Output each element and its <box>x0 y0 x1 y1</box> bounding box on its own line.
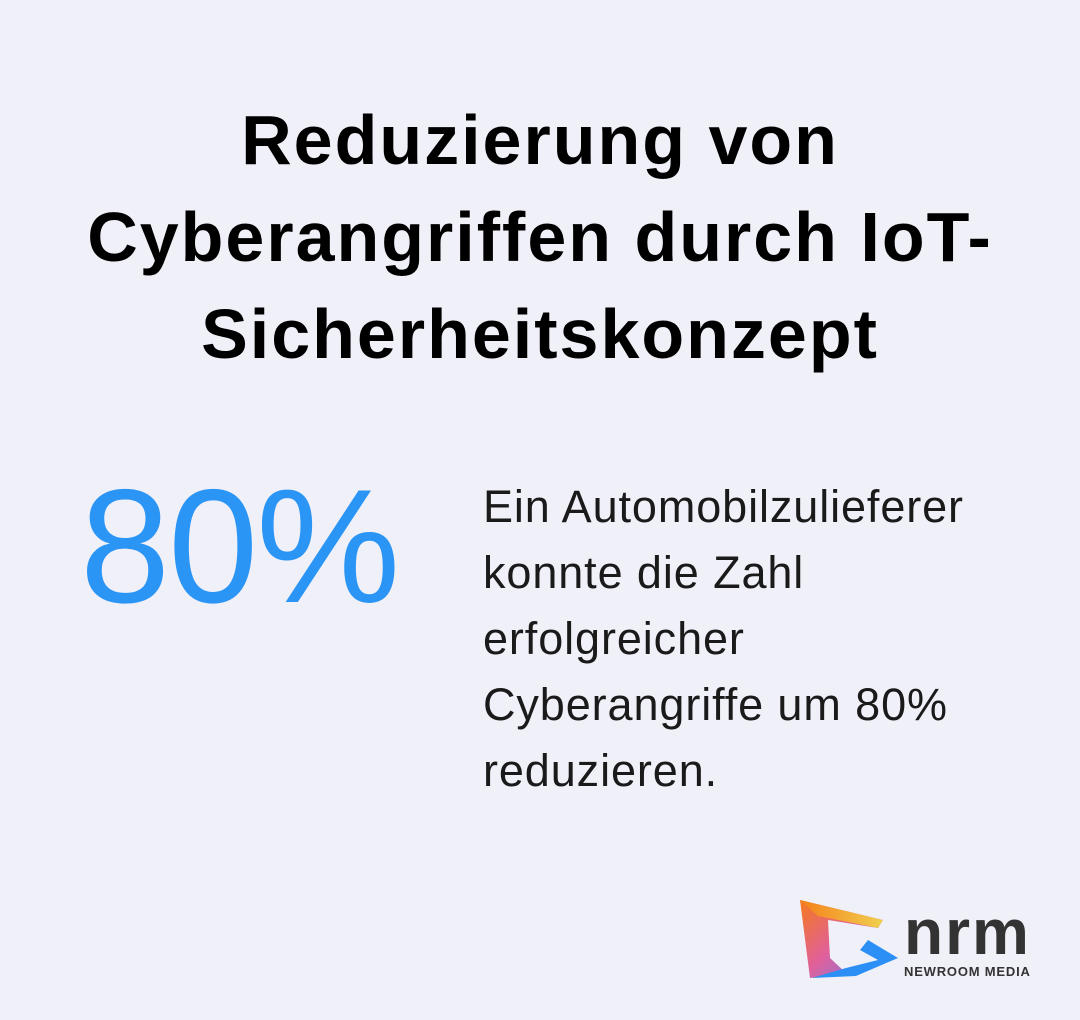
logo: nrm newroom media: nrm <box>904 898 1031 968</box>
description text: Ein Automobilzulieferer <box>483 481 964 532</box>
title: Reduzierung von <box>241 101 839 179</box>
title: Cyberangriffen durch IoT- <box>87 198 993 276</box>
description text <box>483 481 964 796</box>
description text: reduzieren. <box>483 745 718 796</box>
description text: erfolgreicher <box>483 613 745 664</box>
big stat: 80% <box>80 456 398 637</box>
description text: konnte die Zahl <box>483 547 804 598</box>
logo: nrm newroom media <box>800 898 1031 979</box>
title: Sicherheitskonzept <box>201 295 879 373</box>
title <box>87 101 993 373</box>
logo: nrm newroom media: NEWROOM MEDIA <box>904 964 1031 979</box>
description text: Cyberangriffe um 80% <box>483 679 948 730</box>
